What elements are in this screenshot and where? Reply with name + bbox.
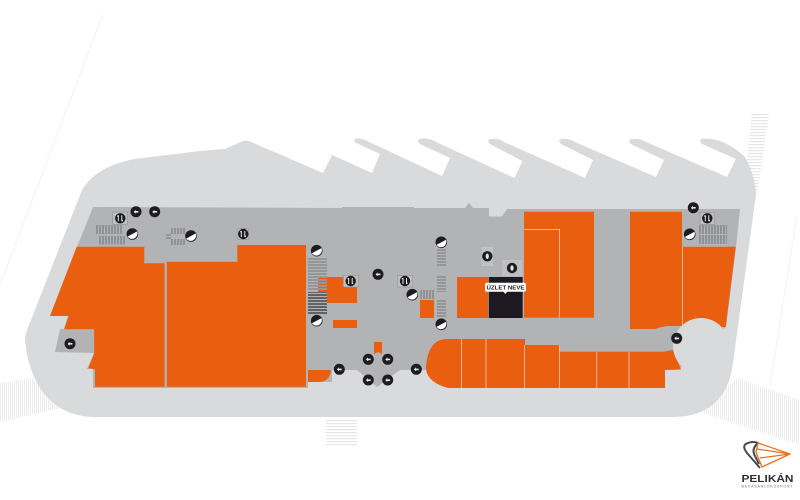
logo mark: gray arc <box>744 442 760 468</box>
parking area outline <box>25 138 756 417</box>
shop: hypermarket <box>167 245 306 387</box>
west anchor gray gap <box>165 263 167 387</box>
shop: small unit <box>420 300 434 318</box>
icons: information <box>482 251 517 273</box>
logo mark: orange beak <box>756 443 790 467</box>
highlighted shop <box>489 277 523 318</box>
roundabout <box>673 318 729 374</box>
logo <box>742 442 794 488</box>
shop dividers <box>462 230 682 388</box>
shop: north block <box>524 212 594 318</box>
shop label callout: ÜZLET NEVE <box>486 284 525 291</box>
logo tagline: BEVÁSÁRLÓKÖZPONT <box>742 484 793 488</box>
icons: entrances <box>64 202 699 386</box>
shop: small kiosk <box>374 342 382 354</box>
shop: unit left of highlighted <box>457 277 488 318</box>
walkway floor <box>50 203 740 388</box>
icon frames <box>113 212 715 287</box>
icons: elevators <box>115 213 713 286</box>
crosswalk: bottom right <box>700 378 800 445</box>
shop: kiosk bar <box>333 320 357 328</box>
icons: escalators <box>126 228 696 330</box>
shop: west anchor <box>50 247 165 387</box>
shop: north east block <box>630 212 682 329</box>
crosswalk: top right <box>747 112 769 195</box>
crosswalk: bottom centre <box>326 419 357 446</box>
shop: centre unit <box>318 277 357 303</box>
shop: curved south row <box>426 339 681 388</box>
stairs <box>96 225 727 317</box>
shop units <box>50 212 736 388</box>
shop label callout <box>485 283 526 294</box>
shop: corner unit <box>308 370 331 382</box>
background site lines <box>0 14 797 385</box>
logo wordmark: PELIKÁN <box>742 472 794 485</box>
shop: east anchor <box>682 247 736 327</box>
crosswalk: bottom left <box>0 378 60 422</box>
